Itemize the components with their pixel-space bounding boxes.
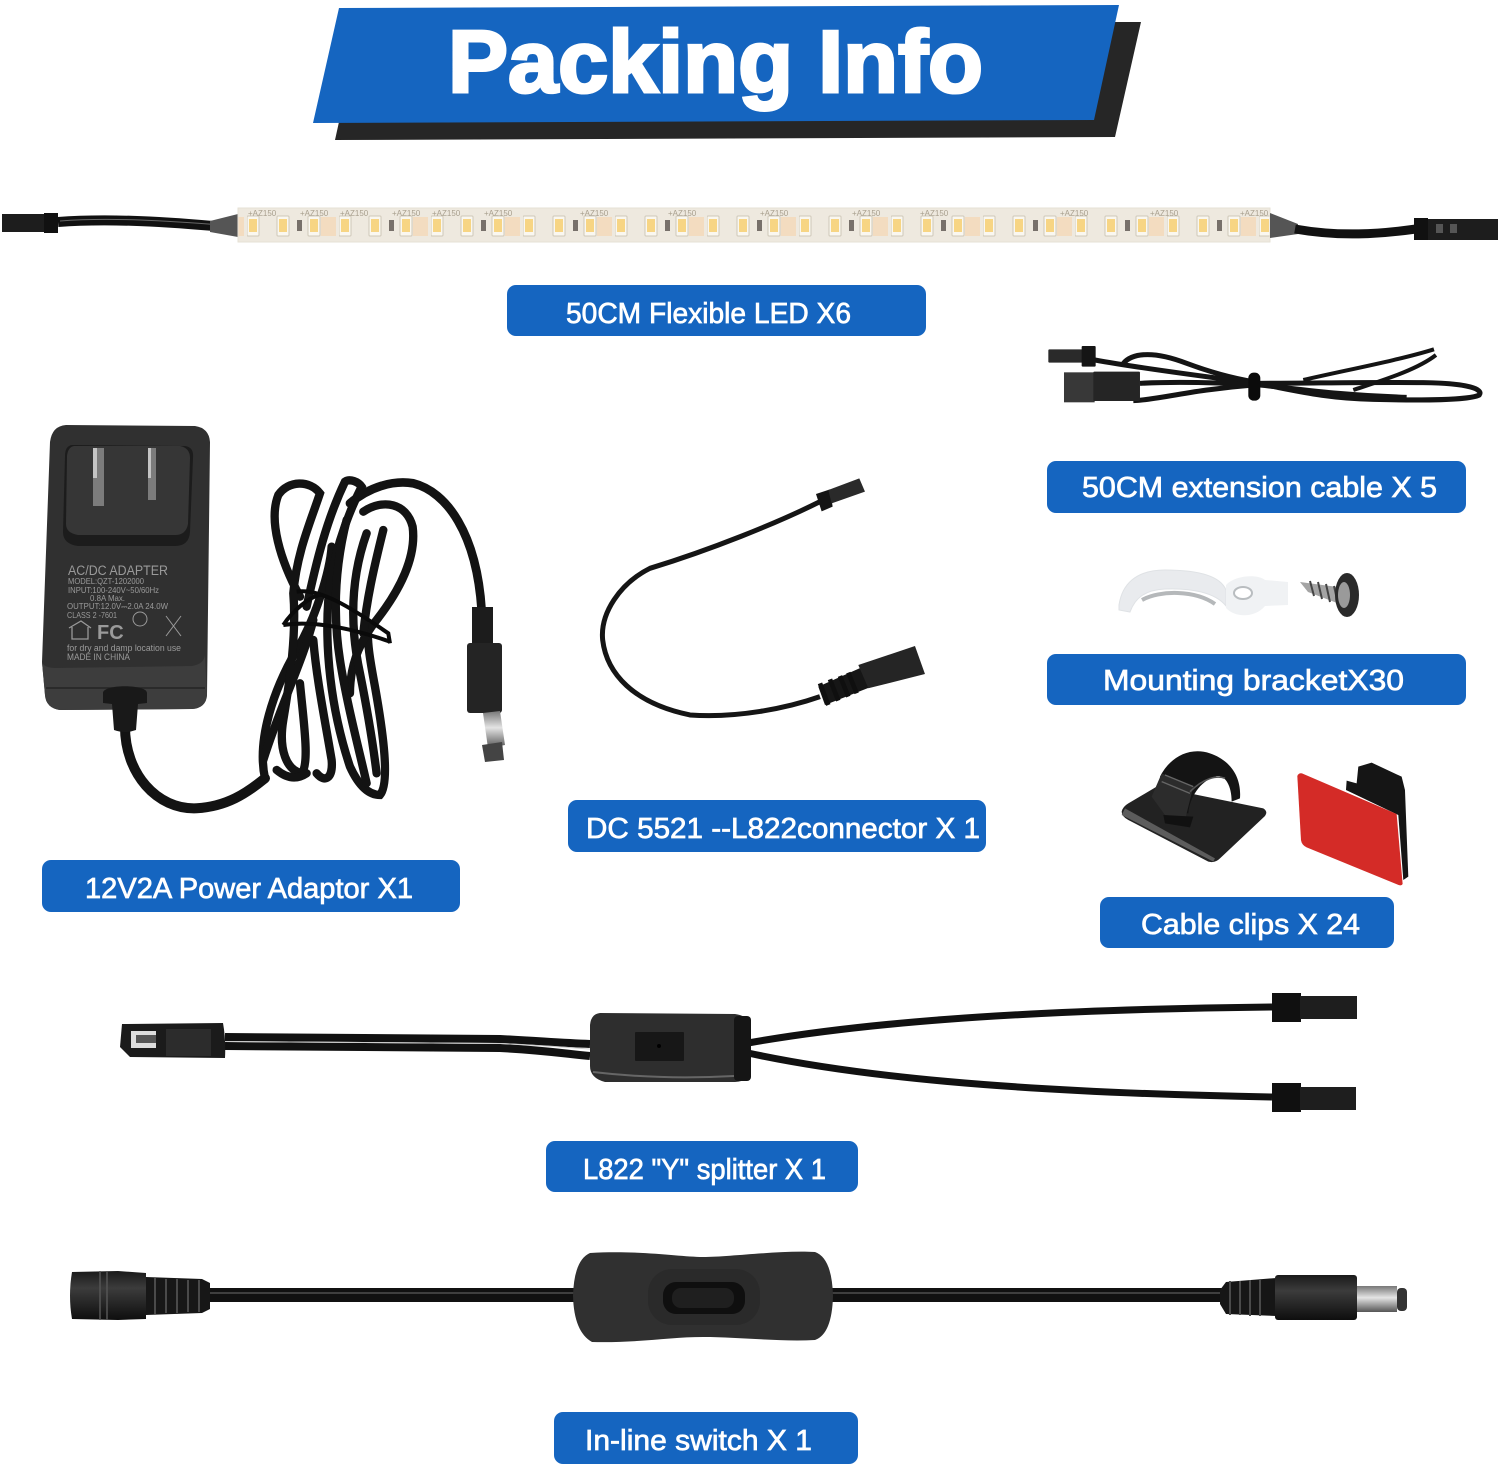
label: mounting bracket [1047, 654, 1466, 705]
left connector [120, 1023, 225, 1058]
LED strip: +AZ150 [1240, 209, 1269, 218]
adaptor printed text: MODEL:QZT-1202000 [68, 577, 145, 586]
LED strip: +AZ150 [760, 209, 789, 218]
LED strip: +AZ150 [300, 209, 329, 218]
label: in-line switch [554, 1412, 858, 1464]
male plug [1220, 1275, 1407, 1320]
Y splitter [120, 993, 1357, 1112]
switch box [590, 1013, 751, 1082]
female socket [70, 1271, 210, 1320]
LED strip: +AZ150 [432, 209, 461, 218]
power adaptor [42, 425, 505, 808]
label: cable clips [1100, 897, 1394, 948]
title banner [313, 5, 1141, 140]
plug prongs [93, 448, 104, 506]
LED strip: +AZ150 [668, 209, 697, 218]
mounting bracket and screw [1119, 570, 1359, 617]
cable clips [1122, 751, 1408, 885]
label: splitter [546, 1141, 858, 1192]
strain relief [103, 686, 147, 732]
adaptor printed text: INPUT:100-240V~50/60Hz [68, 586, 159, 595]
LED strip: +AZ150 [248, 209, 277, 218]
label: in-line switch: In-line switch X 1 [585, 1425, 812, 1457]
LED strip: +AZ150 [1150, 209, 1179, 218]
adaptor printed text: FC [97, 622, 124, 644]
label: extension cable [1047, 461, 1466, 513]
splitter cables [225, 1007, 1272, 1097]
adaptor plug body [42, 425, 210, 710]
extension cable [1048, 346, 1480, 402]
label: mounting bracket: Mounting bracketX30 [1103, 665, 1404, 697]
adaptor printed text: 0.8A Max. [90, 594, 125, 603]
LED strip [2, 208, 1498, 242]
title: Packing Info [448, 12, 983, 111]
LED strip: +AZ150 [392, 209, 421, 218]
adaptor printed text [67, 563, 181, 662]
adaptor printed text: for dry and damp location use [67, 643, 181, 653]
adaptor printed text: OUTPUT:12.0V⎓2.0A 24.0W [67, 602, 168, 611]
LED strip: +AZ150 [852, 209, 881, 218]
label: extension cable: 50CM extension cable X 5 [1082, 472, 1437, 504]
label: flexible LED: 50CM Flexible LED X6 [566, 298, 851, 330]
label: flexible LED [507, 285, 926, 336]
adaptor printed text: MADE IN CHINA [67, 652, 130, 662]
black clip [1122, 751, 1266, 862]
label: DC connector: DC 5521 --L822connector X 1 [586, 813, 980, 845]
right connector upper [1272, 993, 1357, 1022]
label: cable clips: Cable clips X 24 [1141, 909, 1360, 941]
LED strip: +AZ150 [340, 209, 369, 218]
LED strip: +AZ150 [580, 209, 609, 218]
adaptor printed text: CLASS 2 -7601 [67, 611, 117, 620]
switch cable [205, 1288, 1225, 1302]
label: power adaptor [42, 860, 460, 912]
label: power adaptor: 12V2A Power Adaptor X1 [85, 873, 413, 905]
adaptor printed text: AC/DC ADAPTER [68, 563, 168, 578]
rocker body [573, 1252, 833, 1342]
DC plug [472, 607, 493, 644]
LED strip: +AZ150 [1060, 209, 1089, 218]
LED strip: +AZ150 [484, 209, 513, 218]
label: splitter: L822 "Y" splitter X 1 [583, 1154, 826, 1186]
in-line switch [70, 1252, 1407, 1342]
right connector lower [1272, 1083, 1356, 1112]
label: DC connector [568, 800, 986, 852]
adaptor cord coil [125, 480, 482, 808]
red adhesive clip [1297, 763, 1408, 885]
LED strip: +AZ150 [920, 209, 949, 218]
adaptor cord tie [283, 591, 390, 643]
DC 5521 connector cable [602, 478, 925, 716]
